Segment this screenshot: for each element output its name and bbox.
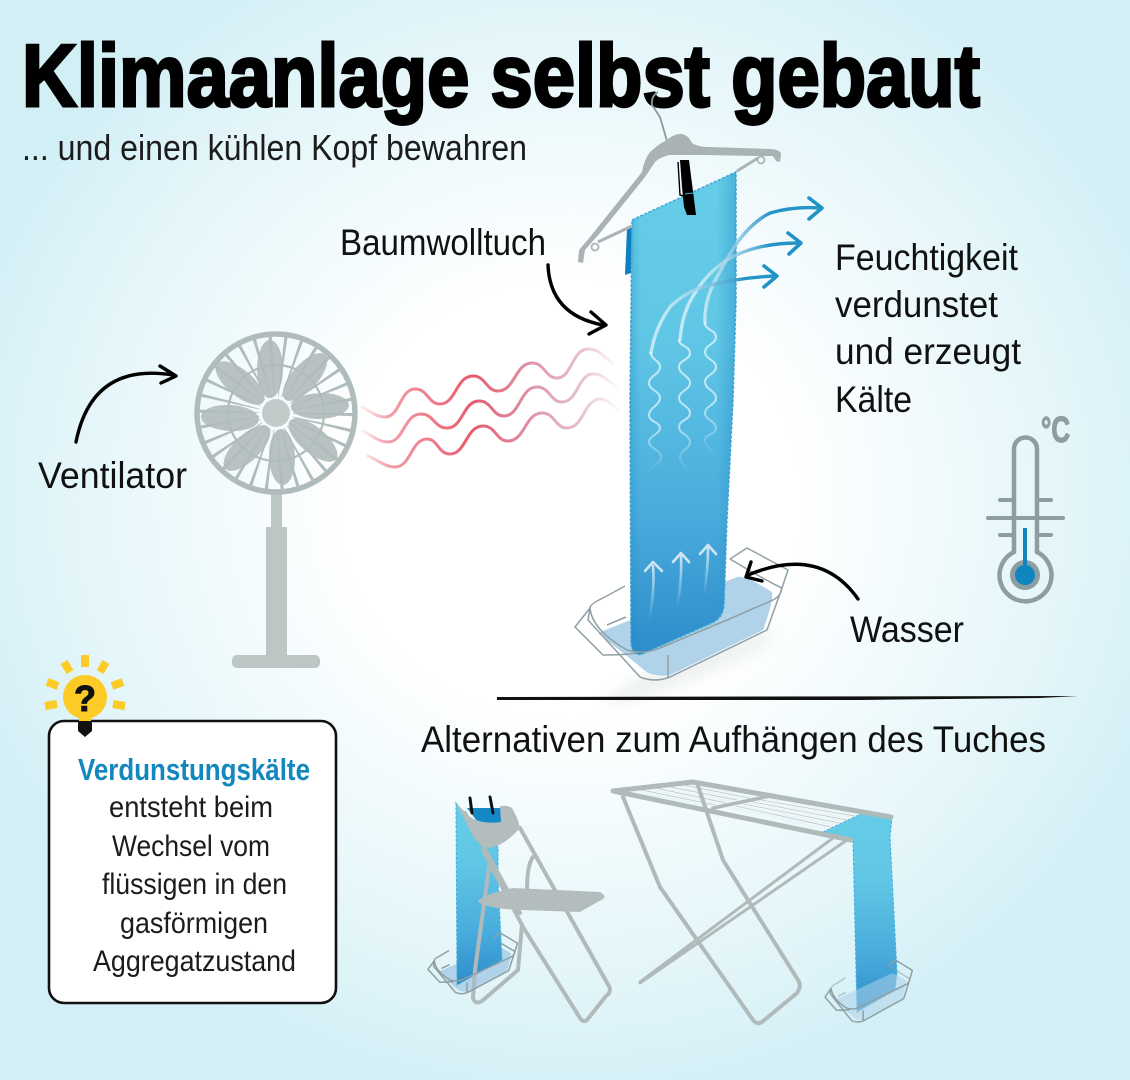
rack tub bbox=[831, 965, 910, 1020]
icon: thermometer bbox=[988, 409, 1070, 601]
fan guard bbox=[197, 334, 355, 492]
chair frame bbox=[465, 813, 610, 1021]
chair tub front bbox=[428, 933, 517, 994]
chair cloth bbox=[456, 803, 502, 985]
icon: light bulb bbox=[45, 655, 125, 737]
chair seat bbox=[478, 888, 604, 912]
fan blades bbox=[200, 340, 349, 485]
arrow to fan bbox=[76, 366, 176, 442]
capillary arrows bbox=[645, 545, 716, 620]
fan stand bbox=[232, 490, 320, 668]
box text: flüssigen in den bbox=[102, 868, 287, 901]
info box bbox=[49, 721, 336, 1003]
evaporation arrows bbox=[651, 198, 822, 353]
chair tub back bbox=[434, 938, 515, 992]
rising vapour lines bbox=[649, 323, 716, 473]
box heading: Verdunstungskälte bbox=[78, 752, 310, 787]
rack mesh bbox=[623, 783, 863, 830]
cloth over seat back bbox=[467, 808, 502, 826]
rack frame bbox=[613, 782, 891, 1023]
label: Ventilator: Ventilator bbox=[38, 455, 187, 496]
label: Feuchtigkeit verdunstet: verdunstet bbox=[835, 284, 999, 325]
icon: thermometer: °C bbox=[1041, 409, 1070, 450]
drying rack with cloth bbox=[613, 782, 912, 1023]
arrow: top bbox=[705, 198, 822, 323]
arrow: bottom bbox=[651, 266, 777, 353]
arrow to water bbox=[746, 562, 858, 599]
label: Feuchtigkeit verdunstet: Kälte bbox=[835, 379, 912, 420]
fan hub bbox=[262, 399, 290, 427]
label: Feuchtigkeit verdunstet bbox=[835, 237, 1022, 420]
box text: gasförmigen bbox=[120, 907, 268, 940]
chair with cloth bbox=[428, 797, 610, 1021]
chair back rest bbox=[456, 803, 520, 848]
divider bbox=[497, 696, 1078, 700]
box text: Aggregatzustand bbox=[93, 945, 296, 978]
fan bbox=[197, 334, 355, 668]
water tub front bbox=[575, 548, 788, 680]
water tub back bbox=[590, 559, 782, 713]
label: Feuchtigkeit verdunstet: und erzeugt bbox=[835, 331, 1022, 372]
box text: entsteht beim bbox=[109, 791, 273, 824]
icon: light bulb: ? bbox=[74, 678, 96, 719]
clips bbox=[470, 797, 493, 813]
title: Klimaanlage selbst gebaut bbox=[22, 26, 980, 125]
rack cloth bbox=[823, 813, 897, 1012]
arrow to cloth bbox=[548, 265, 606, 334]
clothes peg bbox=[678, 160, 696, 215]
box text bbox=[93, 791, 296, 978]
label: Baumwolltuch: Baumwolltuch bbox=[340, 222, 546, 263]
label: Feuchtigkeit verdunstet: Feuchtigkeit bbox=[835, 237, 1019, 278]
coat hanger bbox=[578, 92, 781, 263]
heading: alternatives: Alternativen zum Aufhängen des Tuches bbox=[421, 719, 1046, 760]
warm air waves bbox=[362, 349, 622, 467]
subtitle: ... und einen kühlen Kopf bewahren bbox=[22, 127, 527, 168]
cloth fold bbox=[625, 226, 632, 275]
arrow: middle bbox=[680, 233, 801, 340]
label: Wasser: Wasser bbox=[850, 609, 964, 650]
hanging cotton cloth bbox=[630, 172, 736, 654]
box text: Wechsel vom bbox=[112, 830, 270, 863]
